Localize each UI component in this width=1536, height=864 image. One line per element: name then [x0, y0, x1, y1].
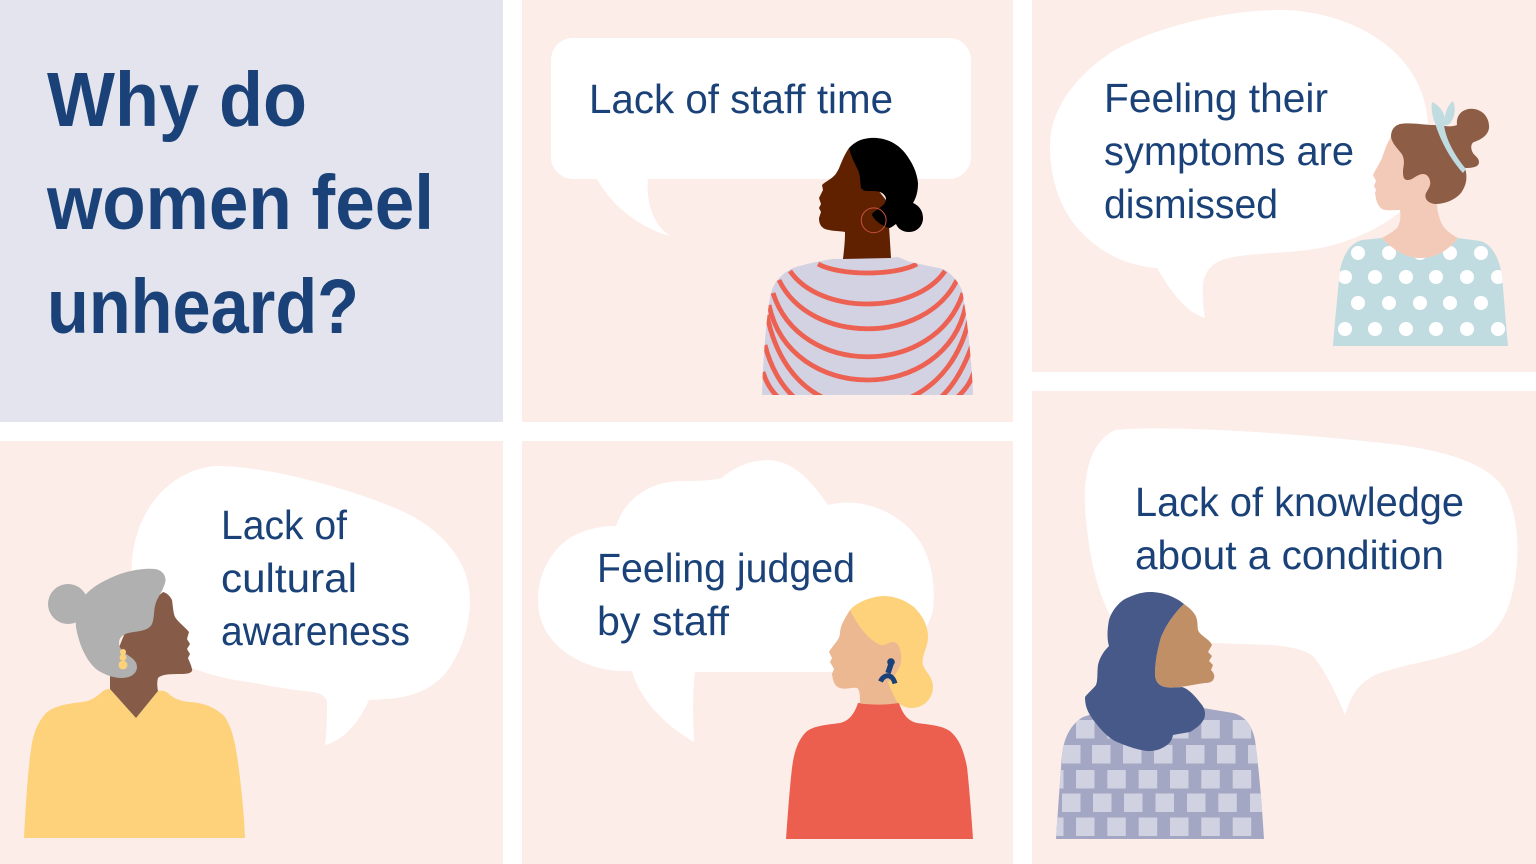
- face: [1155, 604, 1214, 688]
- text: lack of knowledge about a condition: [1135, 479, 1464, 578]
- earring: [880, 658, 895, 684]
- text: feeling their symptoms are dismissed: [1104, 75, 1354, 227]
- panel: lack of staff time: [522, 0, 1013, 422]
- text: feeling their symptoms are dismissed: symptoms are: [1104, 128, 1354, 174]
- panel: feeling judged: [522, 441, 1013, 864]
- hair bun: [48, 584, 88, 624]
- title: [46, 57, 434, 350]
- yellow top: [24, 689, 245, 838]
- skin: [819, 148, 891, 259]
- text: lack of cultural awareness: Lack of: [221, 502, 348, 548]
- speech bubble: wide: [1085, 428, 1518, 715]
- title: unheard?: [47, 264, 359, 350]
- hijab: [1085, 592, 1205, 751]
- figure: older woman with grey hair: [24, 569, 245, 838]
- panel: cultural awareness: [0, 441, 503, 864]
- skin: [829, 610, 905, 705]
- hair: [849, 138, 923, 232]
- hair: [1391, 109, 1489, 204]
- sweater: [762, 257, 973, 395]
- text: lack of cultural awareness: [221, 502, 410, 654]
- panel: lack of knowledge: [1032, 391, 1536, 864]
- text: lack of knowledge about a condition: about a condition: [1135, 532, 1444, 578]
- hair: [48, 569, 166, 678]
- earring: [119, 649, 127, 669]
- skin: [110, 592, 192, 718]
- hair ribbon: [1432, 101, 1466, 173]
- polka dots: [1338, 246, 1505, 336]
- red top: [786, 703, 973, 839]
- text: feeling their symptoms are dismissed: Feeling their: [1104, 75, 1328, 121]
- text: feeling judged by staff: [597, 545, 855, 644]
- sweater stripes: [763, 264, 974, 399]
- panel: title background: [0, 0, 503, 422]
- speech bubble: rounded: [551, 38, 971, 236]
- checked top: [1056, 705, 1264, 839]
- title: Why do: [47, 57, 307, 143]
- title: women feel: [46, 160, 434, 246]
- speech bubble: organic: [1050, 10, 1440, 318]
- hair mass: [76, 569, 166, 678]
- panel: symptoms dismissed: [1032, 0, 1536, 372]
- earring: [861, 208, 886, 233]
- text: lack of cultural awareness: cultural: [221, 555, 357, 601]
- speech bubble: cloud: [538, 460, 934, 742]
- figure: woman with polka dot top: [1333, 101, 1508, 346]
- text: lack of cultural awareness: awareness: [221, 608, 410, 654]
- text: feeling judged by staff: Feeling judged: [597, 545, 855, 591]
- figure: woman in hijab: [1045, 592, 1268, 839]
- text: feeling their symptoms are dismissed: dismissed: [1104, 181, 1278, 227]
- speech bubble: organic: [132, 466, 470, 745]
- top: [1333, 238, 1508, 346]
- hair: [850, 596, 933, 708]
- text: lack of staff time: Lack of staff time: [589, 76, 893, 122]
- text: lack of knowledge about a condition: Lack of knowledge: [1135, 479, 1464, 525]
- figure: woman in striped top: [762, 138, 974, 399]
- skin: [1373, 130, 1458, 258]
- figure: blonde woman in red top: [786, 596, 973, 839]
- check squares: [1045, 720, 1268, 836]
- text: feeling judged by staff: by staff: [597, 598, 730, 644]
